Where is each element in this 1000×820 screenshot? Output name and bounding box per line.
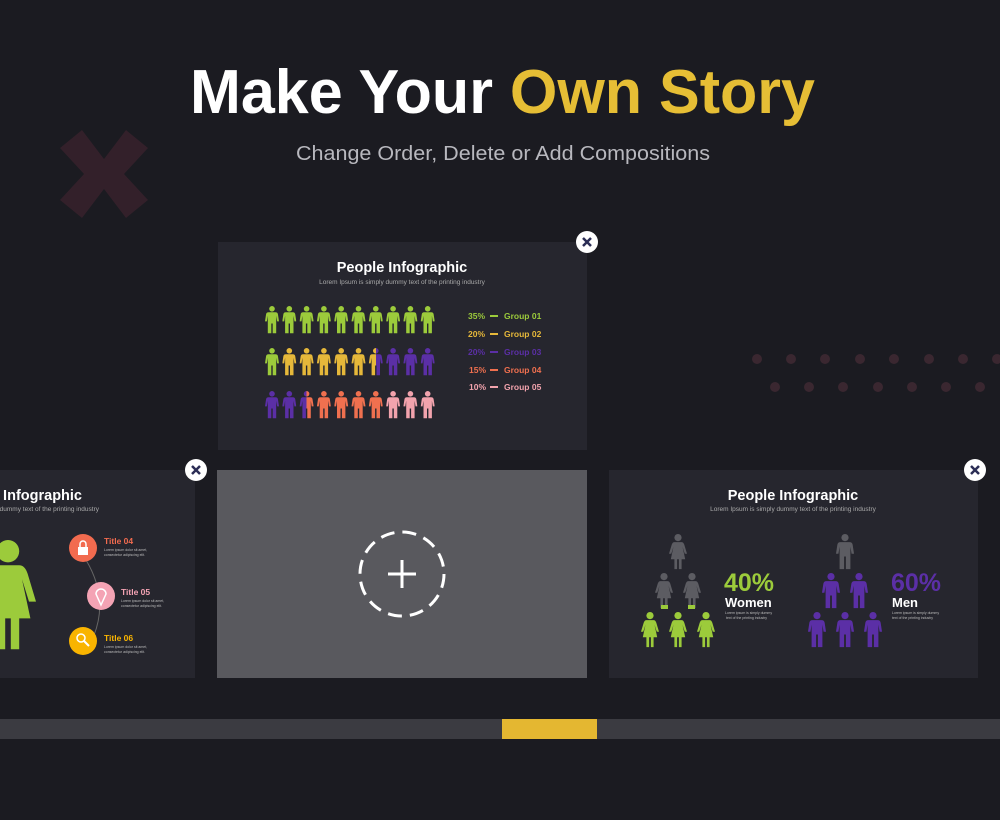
item: title 05 <box>87 582 164 610</box>
item: title 06: consectetur adipiscing elit. <box>104 650 145 654</box>
item: title 04 <box>69 534 147 562</box>
panel: women vs men: 60% <box>891 569 941 597</box>
men pyramid <box>808 534 882 647</box>
decorative X <box>60 130 148 218</box>
legend: Group 01 <box>504 311 542 321</box>
panel: add composition <box>217 470 587 678</box>
legend: 10% <box>469 382 486 392</box>
close button: right <box>964 459 986 481</box>
legend: Group 03 <box>504 347 542 357</box>
panel: left partial infographic <box>0 470 195 678</box>
legend: 35% <box>468 311 485 321</box>
panel: top people infographic: People Infographic <box>337 260 467 276</box>
title: Make Your Own Story <box>190 58 816 127</box>
item: title 06: Title 06 <box>104 633 133 643</box>
panel: top people infographic: Lorem Ipsum is simply dummy text of the printing industry <box>319 279 486 286</box>
panel: women vs men: text of the printing industry <box>892 616 933 620</box>
legend: Group 05 <box>504 382 542 392</box>
panel: women vs men: People Infographic <box>728 488 858 504</box>
legend: Group 04 <box>504 365 542 375</box>
panel: top people infographic <box>218 242 587 450</box>
legend: 20% <box>468 329 485 339</box>
close button: left <box>185 459 207 481</box>
legend: Group 02 <box>504 329 542 339</box>
people rows <box>265 306 435 418</box>
item: title 05: Title 05 <box>121 587 150 597</box>
icon: dashed plus circle <box>360 532 444 616</box>
panel: women vs men: Women <box>725 595 772 610</box>
item: title 06 <box>69 627 147 655</box>
legend: 20% <box>468 347 485 357</box>
panel: women vs men: text of the printing industry <box>726 616 767 620</box>
legend <box>468 311 542 392</box>
panel: women vs men: 40% <box>724 569 774 597</box>
close button: top <box>576 231 598 253</box>
item: title 05: Lorem ipsum dolor sit amet, <box>121 599 164 603</box>
item: title 04: Lorem ipsum dolor sit amet, <box>104 548 147 552</box>
women pyramid <box>641 534 715 647</box>
panel: women vs men: Lorem Ipsum is simply dummy text of the printing industry <box>710 506 877 513</box>
progress bar <box>0 719 1000 739</box>
icon: big woman <box>0 540 36 649</box>
panel: women vs men: Lorem ipsum is simply dummy <box>725 611 772 615</box>
item: title 05: consectetur adipiscing elit. <box>121 604 162 608</box>
panel: women vs men: Men <box>892 595 918 610</box>
subtitle: Change Order, Delete or Add Compositions <box>296 143 710 165</box>
panel: women vs men: Lorem ipsum is simply dummy <box>892 611 939 615</box>
connector <box>86 560 100 640</box>
decorative dots <box>752 354 1000 392</box>
legend: 15% <box>469 365 486 375</box>
item: title 06: Lorem ipsum dolor sit amet, <box>104 645 147 649</box>
item: title 04: consectetur adipiscing elit. <box>104 553 145 557</box>
panel: women vs men <box>609 470 978 678</box>
item: title 04: Title 04 <box>104 536 133 546</box>
